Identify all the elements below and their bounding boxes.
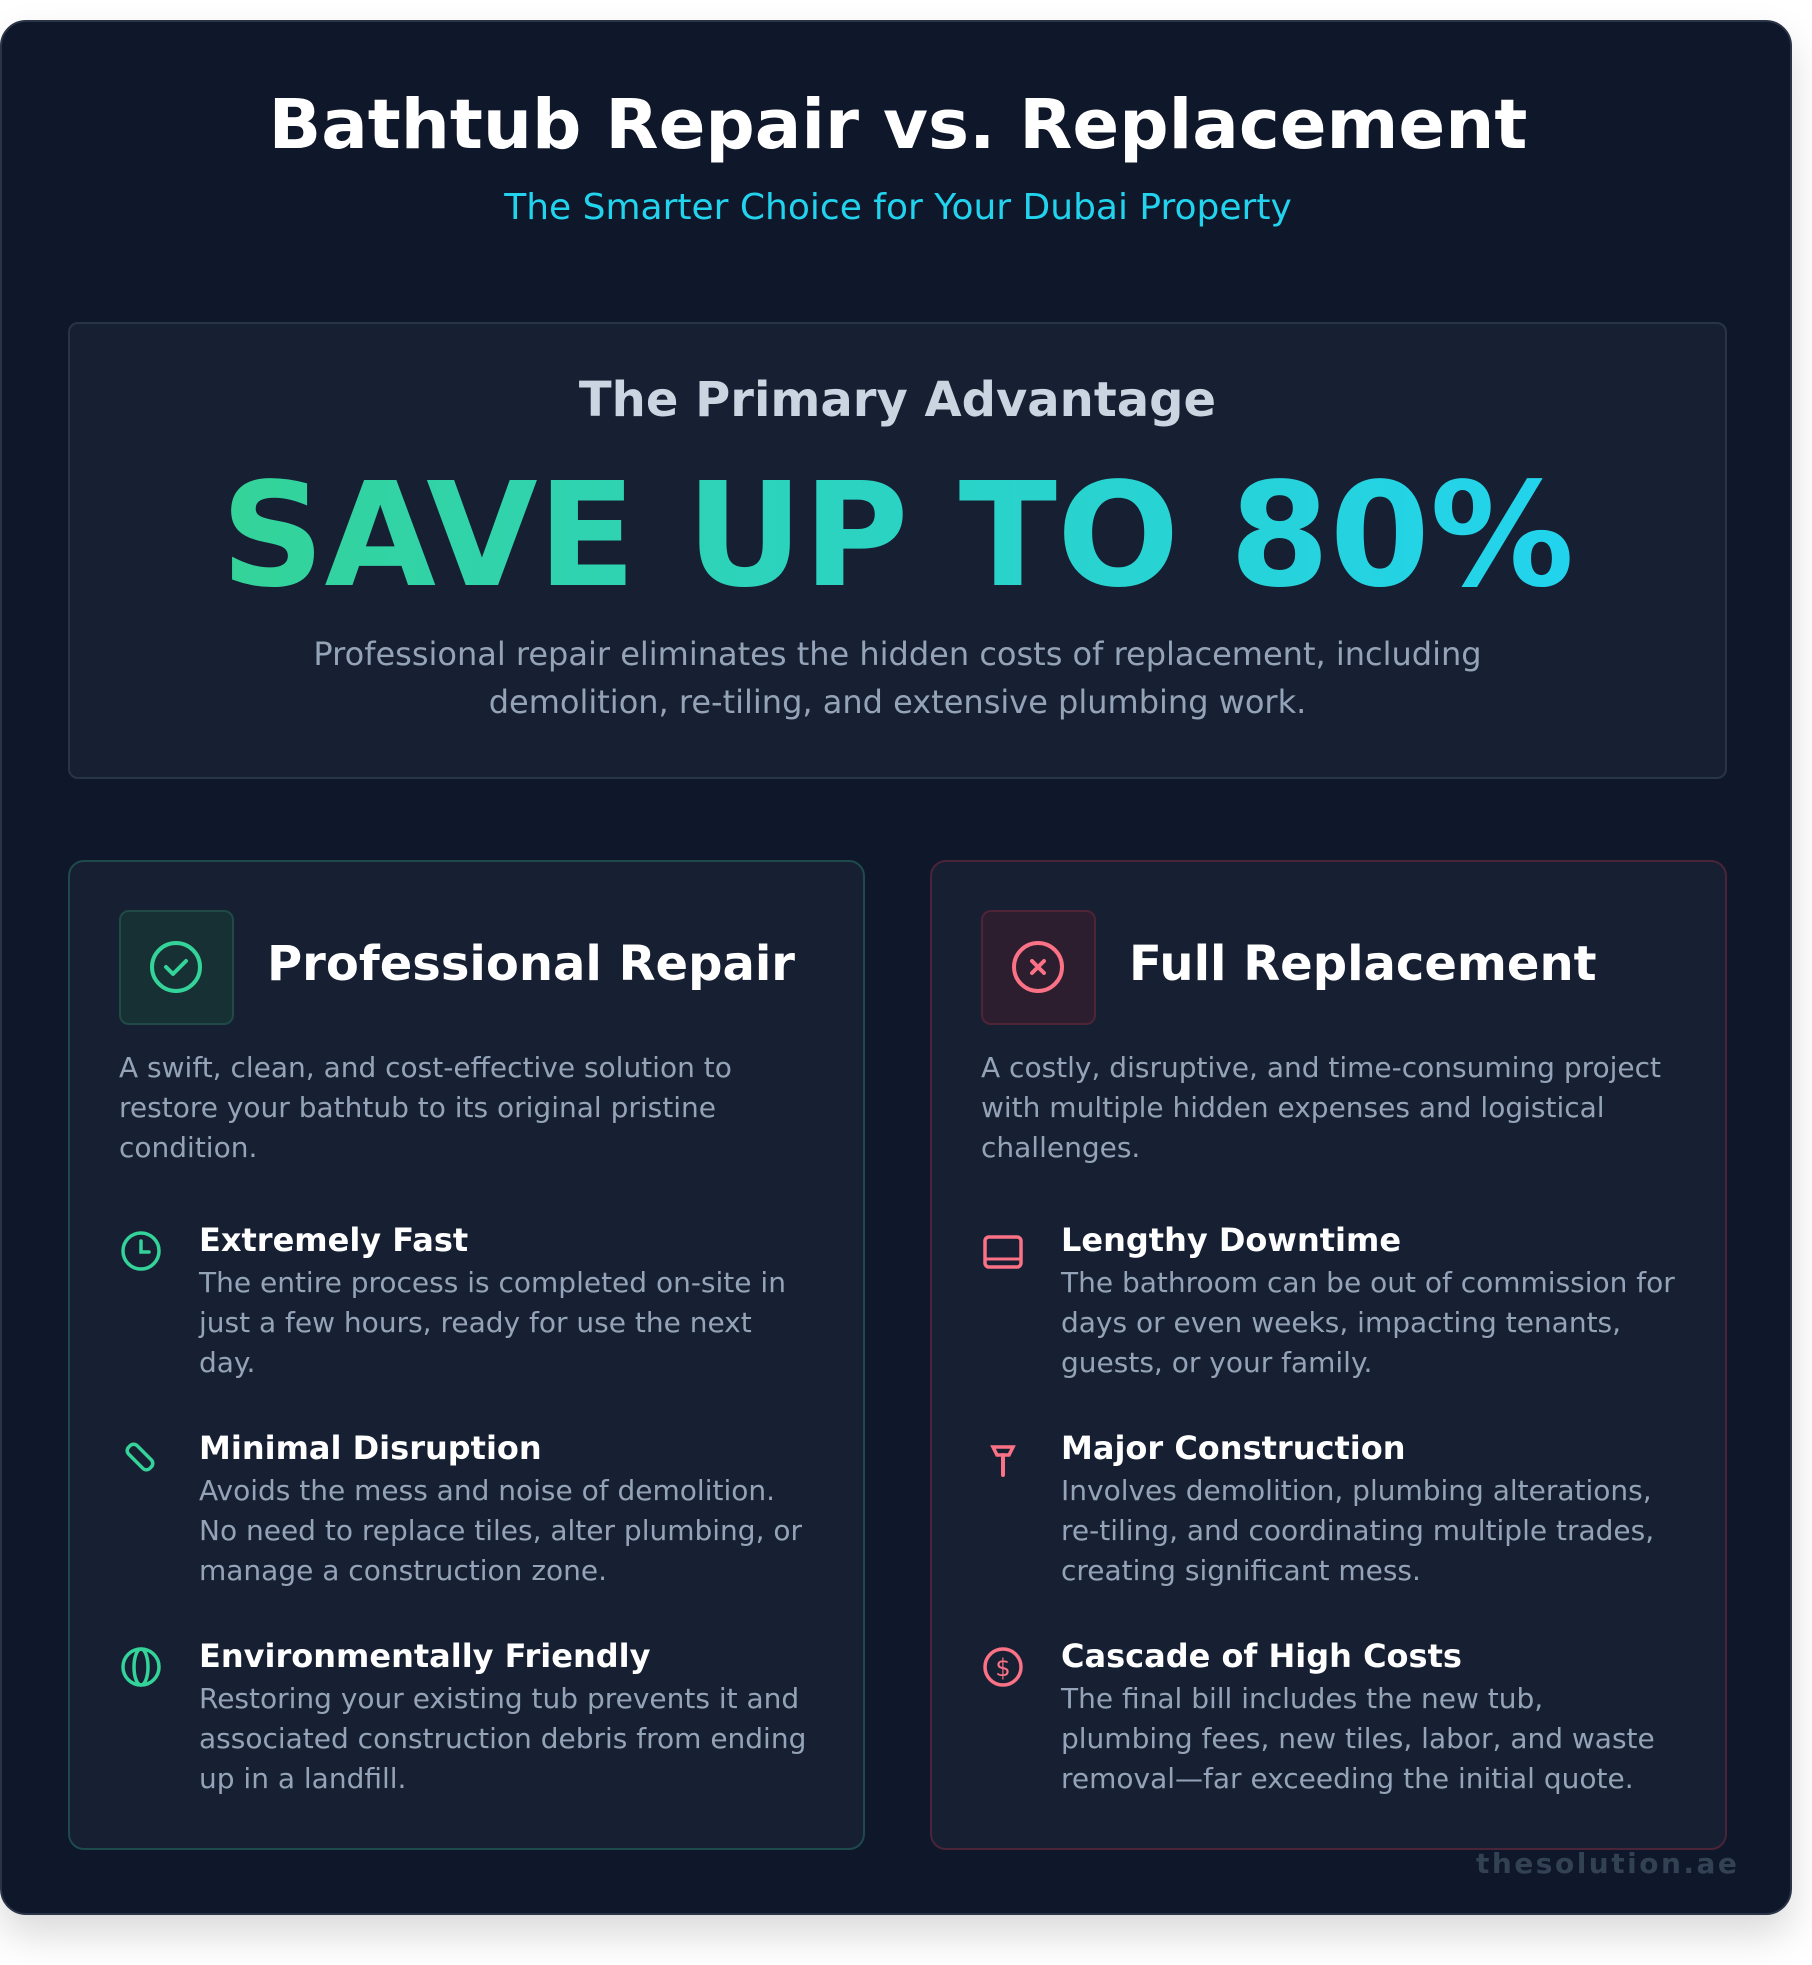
item: extremely fast: Extremely Fast — [199, 1221, 468, 1259]
item: major construction: Major Construction — [1061, 1429, 1405, 1467]
description — [119, 1051, 732, 1164]
icon: clock — [121, 1231, 161, 1271]
heading: professional repair: Professional Repair — [267, 936, 795, 992]
item: extremely fast: day. — [199, 1346, 255, 1379]
item: extremely fast: just a few hours, ready for use the next — [199, 1306, 752, 1339]
icon: check circle — [119, 910, 234, 1025]
item: lengthy downtime: Lengthy Downtime — [1061, 1221, 1401, 1259]
icon: calendar — [983, 1235, 1023, 1269]
icon: brush — [126, 1442, 154, 1472]
item: minimal disruption — [126, 1429, 802, 1587]
item: cascade of high costs: removal—far exceeding the initial quote. — [1061, 1762, 1634, 1795]
icon: x circle — [981, 910, 1096, 1025]
description: challenges. — [981, 1131, 1140, 1164]
advantage description: Professional repair eliminates the hidden costs of replacement, including — [313, 635, 1482, 673]
item: lengthy downtime: guests, or your family. — [1061, 1346, 1372, 1379]
item: major construction — [990, 1429, 1654, 1587]
item: environmentally friendly: associated construction debris from ending — [199, 1722, 806, 1755]
advantage description — [313, 635, 1482, 721]
description: A swift, clean, and cost-effective solution to — [119, 1051, 732, 1084]
item: cascade of high costs — [983, 1637, 1655, 1795]
item: minimal disruption: manage a construction zone. — [199, 1554, 607, 1587]
item: extremely fast: The entire process is completed on-site in — [199, 1266, 786, 1299]
item: cascade of high costs: Cascade of High Costs — [1061, 1637, 1462, 1675]
subtitle: The Smarter Choice for Your Dubai Property — [504, 187, 1292, 228]
description: restore your bathtub to its original pristine — [119, 1091, 716, 1124]
advantage description: demolition, re-tiling, and extensive plumbing work. — [489, 683, 1306, 721]
description: condition. — [119, 1131, 257, 1164]
panel: primary advantage — [68, 322, 1727, 779]
big stat: save up to 80%: SAVE UP TO 80% — [221, 451, 1574, 619]
item: major construction: creating significant mess. — [1061, 1554, 1421, 1587]
panel: professional repair — [68, 860, 865, 1850]
item: minimal disruption: No need to replace tiles, alter plumbing, or — [199, 1514, 802, 1547]
watermark: thesolution.ae — [1476, 1847, 1739, 1880]
description: with multiple hidden expenses and logistical — [981, 1091, 1605, 1124]
item: lengthy downtime: days or even weeks, impacting tenants, — [1061, 1306, 1621, 1339]
item: environmentally friendly: up in a landfill. — [199, 1762, 406, 1795]
icon: dollar: $ — [995, 1654, 1011, 1682]
heading: primary advantage: The Primary Advantage — [579, 372, 1216, 428]
title: Bathtub Repair vs. Replacement — [269, 85, 1527, 165]
item: minimal disruption: Minimal Disruption — [199, 1429, 542, 1467]
item: environmentally friendly: Environmentally Friendly — [199, 1637, 650, 1675]
item: extremely fast — [121, 1221, 786, 1379]
item: environmentally friendly — [121, 1637, 806, 1795]
description — [981, 1051, 1661, 1164]
heading: full replacement: Full Replacement — [1129, 936, 1597, 992]
item: cascade of high costs: The final bill includes the new tub, — [1061, 1682, 1543, 1715]
icon: dollar — [983, 1647, 1023, 1687]
panel: full replacement — [930, 860, 1727, 1850]
item: minimal disruption: Avoids the mess and noise of demolition. — [199, 1474, 775, 1507]
item: major construction: Involves demolition, plumbing alterations, — [1061, 1474, 1652, 1507]
item: major construction: re-tiling, and coordinating multiple trades, — [1061, 1514, 1654, 1547]
item: cascade of high costs: plumbing fees, new tiles, labor, and waste — [1061, 1722, 1655, 1755]
item: environmentally friendly: Restoring your existing tub prevents it and — [199, 1682, 799, 1715]
icon: hammer — [990, 1445, 1016, 1477]
description: A costly, disruptive, and time-consuming project — [981, 1051, 1661, 1084]
item: lengthy downtime — [983, 1221, 1675, 1379]
item: lengthy downtime: The bathroom can be out of commission for — [1061, 1266, 1675, 1299]
icon: globe — [121, 1647, 161, 1687]
